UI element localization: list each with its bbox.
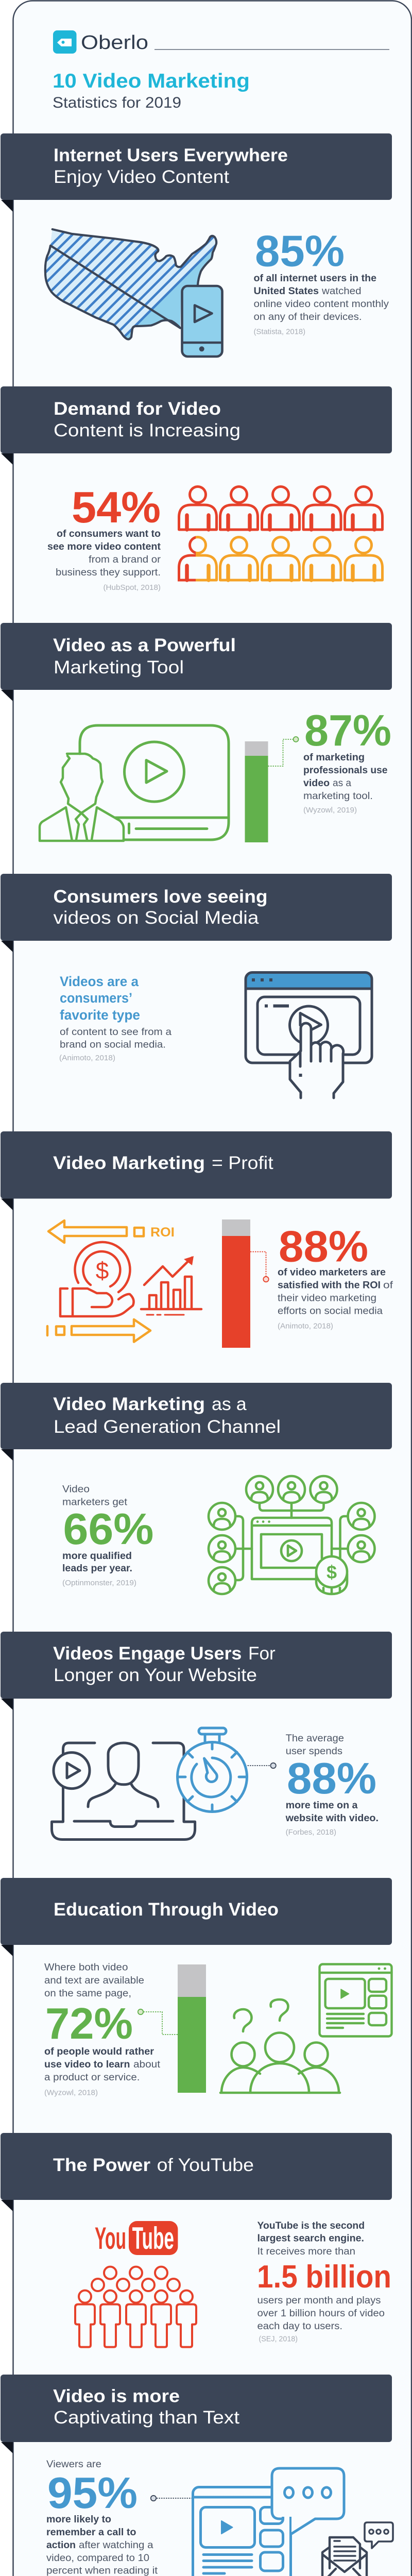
icon: envelope with small bubble bbox=[322, 2522, 393, 2576]
stat: 1.5 billion: YouTube is the second bbox=[258, 2221, 365, 2231]
heading banner 4: Consumers love seeing bbox=[54, 887, 268, 907]
stat: 1.5 billion: users per month and plays bbox=[258, 2295, 381, 2306]
stat: 88 percent ROI: their video marketing bbox=[278, 1293, 376, 1303]
logo: YouTube: You bbox=[95, 2221, 126, 2256]
heading banner 8: Education Through Video bbox=[54, 1900, 279, 1920]
heading banner 7: For bbox=[248, 1643, 276, 1664]
heading banner 6: as a bbox=[212, 1394, 247, 1414]
stat: 88 percent ROI: of video marketers are bbox=[278, 1267, 386, 1278]
stat: favorite type: of content to see from a bbox=[60, 1027, 171, 1038]
heading banner 1 bbox=[1, 133, 392, 212]
heading banner 9 bbox=[1, 2133, 392, 2211]
stat: 95 percent: Viewers are bbox=[46, 2459, 101, 2470]
stat: 87 percent bbox=[303, 706, 391, 815]
stat: 1.5 billion: It receives more than bbox=[258, 2246, 355, 2257]
stat: 88 percent time: website with video. bbox=[285, 1813, 379, 1824]
stat: 72 percent: and text are available bbox=[44, 1975, 144, 1986]
ROI label: ROI bbox=[150, 1225, 175, 1240]
stat: 95 percent: 95% bbox=[47, 2469, 138, 2518]
stat: 88 percent ROI bbox=[278, 1222, 393, 1331]
stat: 66 percent: marketers get bbox=[62, 1497, 128, 1507]
arrow: return right bbox=[47, 1319, 150, 1342]
stat: 66 percent: (Optinmonster, 2019) bbox=[62, 1579, 136, 1587]
stat: 85 percent: of all internet users in the bbox=[253, 273, 376, 284]
icon: audience with questions bbox=[220, 1999, 340, 2093]
stat: 85 percent: United States bbox=[253, 286, 319, 297]
stat: 88 percent ROI: efforts on social media bbox=[278, 1306, 383, 1317]
heading banner 10: Video is more bbox=[53, 2386, 180, 2406]
stat: 72 percent: about bbox=[133, 2059, 161, 2070]
bar: 88 percent ROI bbox=[222, 1219, 269, 1348]
stat: 85 percent: watched bbox=[321, 286, 362, 297]
heading banner 7: Longer on Your Website bbox=[54, 1665, 257, 1685]
stat: 66 percent bbox=[62, 1484, 153, 1587]
logo: YouTube: Tube bbox=[132, 2221, 174, 2256]
stat: 1.5 billion: 1.5 billion bbox=[257, 2259, 391, 2295]
title: 10 Video Marketing bbox=[53, 70, 250, 92]
stat: 72 percent bbox=[44, 1962, 161, 2097]
heading banner 1: Internet Users Everywhere bbox=[54, 145, 288, 165]
stat: 66 percent: Video bbox=[62, 1484, 90, 1495]
stat: 87 percent: 87% bbox=[304, 706, 391, 755]
stat: 72 percent: 72% bbox=[45, 1999, 133, 2048]
pictogram: ten people bbox=[179, 486, 382, 580]
connector: stopwatch to stat bbox=[248, 1763, 276, 1768]
heading banner 7 bbox=[1, 1632, 392, 1710]
stat: favorite type: consumers’ bbox=[60, 990, 132, 1006]
stat: 54 percent: from a brand or bbox=[89, 554, 161, 565]
stat: 1.5 billion bbox=[257, 2221, 391, 2344]
stat: 72 percent: (Wyzowl, 2018) bbox=[44, 2089, 98, 2097]
pictogram: crowd bbox=[75, 2267, 196, 2347]
heading banner 4: videos on Social Media bbox=[54, 908, 259, 928]
stat: 72 percent: use video to learn bbox=[44, 2059, 130, 2070]
icon: hand bbox=[60, 1289, 134, 1316]
icon: coin: $ bbox=[96, 1257, 109, 1284]
stat: 1.5 billion: over 1 billion hours of video bbox=[258, 2308, 385, 2319]
stat: 95 percent: remember a call to bbox=[46, 2527, 136, 2538]
heading banner 9: The Power bbox=[53, 2155, 150, 2175]
stat: favorite type: Videos are a bbox=[60, 974, 139, 989]
stat: 88 percent ROI: of bbox=[383, 1280, 393, 1291]
icon: presenter with video screen bbox=[40, 725, 229, 841]
stat: 66 percent: leads per year. bbox=[62, 1563, 132, 1574]
stat: 88 percent ROI: 88% bbox=[279, 1222, 368, 1272]
heading banner 10 bbox=[1, 2375, 392, 2453]
stat: 88 percent time: The average bbox=[286, 1733, 344, 1744]
stat: 1.5 billion: each day to users. bbox=[258, 2321, 342, 2332]
icon: video web page bbox=[319, 1964, 391, 2036]
header bbox=[53, 30, 250, 111]
stat: 85 percent: on any of their devices. bbox=[253, 312, 362, 323]
stat: 54 percent: see more video content bbox=[47, 541, 161, 552]
stat: favorite type: brand on social media. bbox=[60, 1040, 166, 1050]
icon: ROI money hand and growth chart bbox=[47, 1221, 201, 1342]
stat: 54 percent bbox=[47, 483, 161, 592]
stat: 87 percent: marketing tool. bbox=[303, 791, 373, 802]
stat: 88 percent time: 88% bbox=[287, 1754, 376, 1803]
heading banner 6: Lead Generation Channel bbox=[54, 1417, 281, 1437]
heading banner 5 bbox=[1, 1131, 392, 1210]
stat: 85 percent: online video content monthly bbox=[253, 299, 389, 310]
icon: lead network bbox=[209, 1476, 375, 1594]
stat: 54 percent: of consumers want to bbox=[57, 529, 161, 539]
stat: 88 percent time bbox=[285, 1733, 379, 1837]
stat: favorite type: (Animoto, 2018) bbox=[59, 1054, 115, 1062]
stat: 72 percent: on the same page, bbox=[44, 1988, 131, 1999]
heading banner 5: = Profit bbox=[212, 1153, 273, 1173]
stat: 87 percent: as a bbox=[333, 778, 351, 789]
icon: Oberlo logo bbox=[53, 30, 76, 54]
heading banner 6: Video Marketing bbox=[53, 1394, 205, 1414]
logo wordmark: Oberlo bbox=[81, 32, 148, 54]
stat: 95 percent: more likely to bbox=[46, 2514, 111, 2525]
stat: 85 percent bbox=[253, 227, 389, 336]
stat: 54 percent: business they support. bbox=[56, 567, 161, 578]
stat: 88 percent time: (Forbes, 2018) bbox=[286, 1828, 336, 1837]
stat: 72 percent: a product or service. bbox=[44, 2072, 140, 2083]
heading banner 3: Video as a Powerful bbox=[53, 635, 236, 655]
stat: 88 percent ROI: (Animoto, 2018) bbox=[278, 1322, 333, 1331]
stat: 95 percent: percent when reading it bbox=[46, 2566, 158, 2576]
stat: 72 percent: of people would rather bbox=[44, 2046, 154, 2057]
stat: 72 percent: Where both video bbox=[44, 1962, 128, 1973]
heading banner 10: Captivating than Text bbox=[54, 2408, 239, 2428]
heading banner 3: Marketing Tool bbox=[54, 657, 184, 677]
stat: 95 percent: after watching a bbox=[79, 2540, 153, 2551]
heading banner 4 bbox=[1, 874, 392, 952]
stat: 88 percent time: more time on a bbox=[286, 1800, 358, 1811]
stat: 87 percent: professionals use bbox=[303, 765, 387, 776]
stat: 1.5 billion: (SEJ, 2018) bbox=[259, 2335, 298, 2344]
stat: 54 percent: 54% bbox=[72, 483, 161, 532]
heading banner 1: Enjoy Video Content bbox=[54, 167, 229, 187]
subtitle: Statistics for 2019 bbox=[53, 94, 181, 111]
stat: 54 percent: (HubSpot, 2018) bbox=[103, 583, 161, 592]
heading banner 2: Content is Increasing bbox=[54, 420, 241, 440]
stat: 87 percent: of marketing bbox=[303, 752, 365, 763]
stat: 88 percent time: user spends bbox=[286, 1746, 342, 1757]
stat: 95 percent bbox=[46, 2459, 158, 2576]
heading banner 7: Videos Engage Users bbox=[53, 1643, 242, 1664]
stat: 1.5 billion: largest search engine. bbox=[258, 2233, 364, 2244]
icon: US map with phone bbox=[44, 228, 224, 358]
stat: 66 percent: 66% bbox=[63, 1505, 153, 1554]
icon: lead network: $ bbox=[327, 1562, 337, 1583]
stat: 85 percent: 85% bbox=[255, 227, 345, 276]
heading banner 9: of YouTube bbox=[157, 2155, 254, 2175]
heading banner 2: Demand for Video bbox=[54, 399, 221, 419]
arrow: ROI left bbox=[48, 1221, 127, 1243]
heading banner 5: Video Marketing bbox=[53, 1153, 205, 1173]
stat: 66 percent: more qualified bbox=[62, 1551, 132, 1562]
heading banner 2 bbox=[1, 386, 392, 465]
icon: video page with speech bubble bbox=[193, 2468, 344, 2576]
stat: 88 percent ROI: satisfied with the ROI bbox=[278, 1280, 381, 1291]
icon: laptop with user and stopwatch bbox=[52, 1728, 247, 1839]
bar: 87 percent bbox=[245, 737, 299, 842]
stat: 87 percent: (Wyzowl, 2019) bbox=[303, 806, 357, 815]
heading banner 6 bbox=[1, 1383, 392, 1461]
icon: browser with hand tapping play bbox=[246, 973, 372, 1099]
stat: 87 percent: video bbox=[303, 778, 330, 789]
stat: 95 percent: video, compared to 10 bbox=[46, 2553, 149, 2564]
stat: 85 percent: (Statista, 2018) bbox=[253, 328, 305, 336]
logo: YouTube bbox=[95, 2221, 178, 2256]
ROI label bbox=[134, 1225, 175, 1240]
chart: growth bbox=[141, 1258, 201, 1309]
stat: favorite type: favorite type bbox=[60, 1007, 140, 1023]
heading banner 8 bbox=[1, 1878, 392, 1956]
heading banner 3 bbox=[1, 623, 392, 701]
bar: 72 percent bbox=[138, 1964, 206, 2093]
icon: coin bbox=[75, 1242, 130, 1292]
connector: stat to video window bbox=[151, 2496, 192, 2501]
stat: favorite type bbox=[59, 974, 171, 1062]
stat: 95 percent: action bbox=[46, 2540, 76, 2551]
